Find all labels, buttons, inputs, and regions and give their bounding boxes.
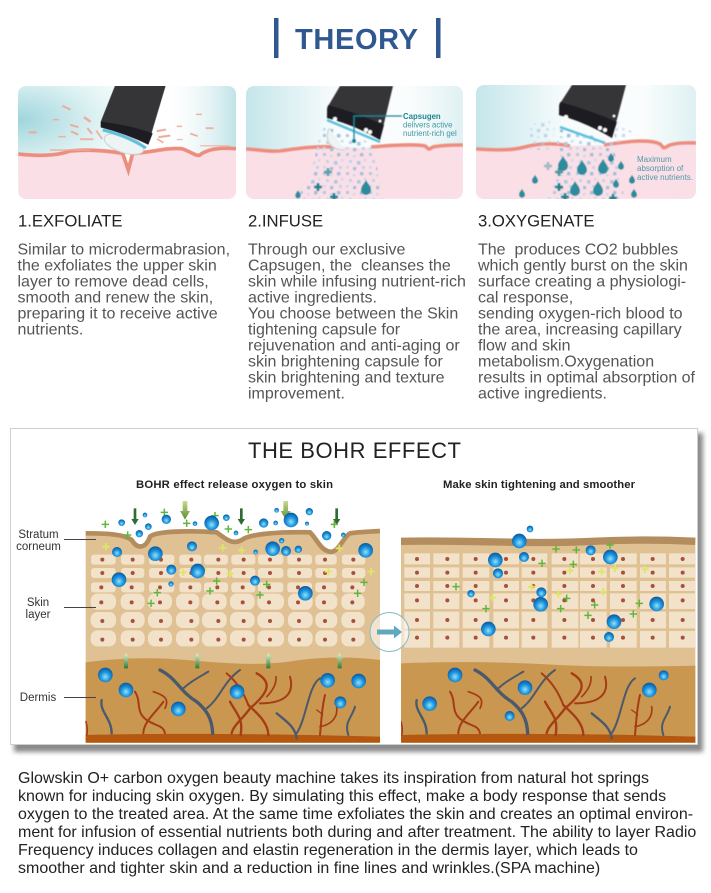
- callout: maximum absorption: Maximum: [637, 155, 672, 164]
- text block: oxygenate: active ingredients.: [478, 386, 607, 402]
- text block: oxygenate: which gently burst on the skin: [477, 258, 688, 274]
- text block: description: smoother and tighter skin and a reduction in fine lines and wrinkles.(SPA machine): [18, 860, 600, 877]
- plus signs: [452, 541, 649, 619]
- label: stratum corneum: [16, 529, 96, 553]
- panel: infuse illustration: [246, 86, 463, 201]
- text block: exfoliate: [18, 242, 230, 338]
- callout: capsugen: [403, 112, 457, 138]
- skin cells: [404, 553, 695, 648]
- text block: exfoliate: nutrients.: [18, 322, 83, 338]
- text block: exfoliate: the exfoliates the upper skin: [18, 258, 217, 274]
- label: stratum corneum: Stratum: [18, 529, 59, 541]
- text block: exfoliate: preparing it to receive active: [18, 306, 218, 322]
- callout: maximum absorption: [637, 156, 692, 180]
- text block: oxygenate: flow and skin: [478, 338, 570, 354]
- down arrows: [131, 508, 139, 525]
- skin cells: [91, 555, 365, 646]
- panel: the Bohr effect: [10, 428, 703, 752]
- title: THEORY: [274, 18, 440, 58]
- panel: oxygenate illustration: [476, 85, 696, 202]
- callout: capsugen: nutrient-rich gel: [403, 129, 457, 138]
- text block: description: Frequency induces collagen and elastin regeneration in the dermis layer, which leads to: [18, 842, 638, 859]
- subheading: left diagram: BOHR effect release oxygen to skin: [136, 479, 333, 491]
- text block: description: Glowskin O+ carbon oxygen beauty machine takes its inspiration from natural hot springs: [18, 770, 649, 787]
- oxygen bubbles: [422, 526, 669, 721]
- text block: infuse: tightening capsule for: [248, 322, 401, 338]
- text block: exfoliate: smooth and renew the skin,: [18, 290, 213, 306]
- text block: oxygenate: [477, 242, 696, 402]
- text block: infuse: skin brightening capsule for: [248, 354, 443, 370]
- callout: capsugen: delivers active: [403, 120, 452, 130]
- up arrows: [122, 653, 344, 668]
- diagram: skin before: [86, 501, 380, 745]
- panel: exfoliate illustration: [18, 86, 236, 199]
- text block: infuse: You choose between the Skin: [248, 306, 458, 322]
- label: skin layer: layer: [26, 609, 51, 621]
- text block: infuse: Capsugen, the cleanses the: [248, 258, 451, 274]
- text block: description: ment for infusion of essential nutrients both during and after treatment. The ability to layer Radio: [18, 824, 696, 841]
- title: THEORY: THEORY: [295, 24, 418, 56]
- callout: maximum absorption: absorption of: [637, 164, 684, 173]
- label: stratum corneum: corneum: [16, 541, 61, 553]
- text block: description: known for inducing skin oxygen. By simulating this effect, make a body response that sends: [18, 788, 666, 805]
- text block: exfoliate: Similar to microdermabrasion,: [18, 242, 230, 258]
- heading: 1.EXFOLIATE: 1.EXFOLIATE: [18, 212, 122, 230]
- text block: oxygenate: the area, increasing capillary: [478, 322, 682, 338]
- callout: maximum absorption: active nutrients.: [637, 173, 693, 182]
- callout: capsugen: Capsugen: [403, 112, 441, 121]
- label: skin layer: [26, 597, 96, 621]
- oxygen bubbles: [98, 508, 373, 716]
- text block: description: [18, 770, 696, 877]
- label: dermis: [20, 692, 96, 704]
- text block: infuse: [248, 242, 466, 402]
- label: dermis: Dermis: [20, 692, 56, 704]
- text block: infuse: Through our exclusive: [248, 242, 406, 258]
- text block: infuse: active ingredients.: [248, 290, 377, 306]
- text block: oxygenate: sending oxygen-rich blood to: [478, 306, 683, 322]
- text block: infuse: improvement.: [248, 386, 345, 402]
- text block: oxygenate: surface creating a physiologi-: [478, 274, 686, 290]
- text block: oxygenate: cal response,: [478, 290, 573, 306]
- heading: 3.OXYGENATE: 3.OXYGENATE: [478, 212, 595, 230]
- subheading: right diagram: Make skin tightening and smoother: [443, 479, 636, 491]
- diagram: skin after: [401, 526, 695, 745]
- heading: 2.INFUSE: 2.INFUSE: [248, 212, 323, 230]
- text block: infuse: skin while infusing nutrient-rich: [248, 274, 466, 290]
- text block: oxygenate: results in optimal absorption of: [478, 370, 696, 386]
- text block: description: oxygen to the treated area. At the same time exfoliates the skin and creates an optimal environ-: [18, 806, 693, 823]
- text block: exfoliate: layer to remove dead cells,: [18, 274, 209, 290]
- label: skin layer: Skin: [27, 597, 49, 609]
- heading: THE BOHR EFFECT: THE BOHR EFFECT: [248, 438, 461, 463]
- text block: oxygenate: metabolism.Oxygenation: [478, 354, 654, 370]
- text block: oxygenate: The produces CO2 bubbles: [478, 242, 678, 258]
- plus signs: [102, 509, 375, 607]
- icon: transition arrow: [370, 612, 409, 652]
- text block: infuse: rejuvenation and anti-aging or: [248, 338, 460, 354]
- text block: infuse: skin brightening and texture: [248, 370, 445, 386]
